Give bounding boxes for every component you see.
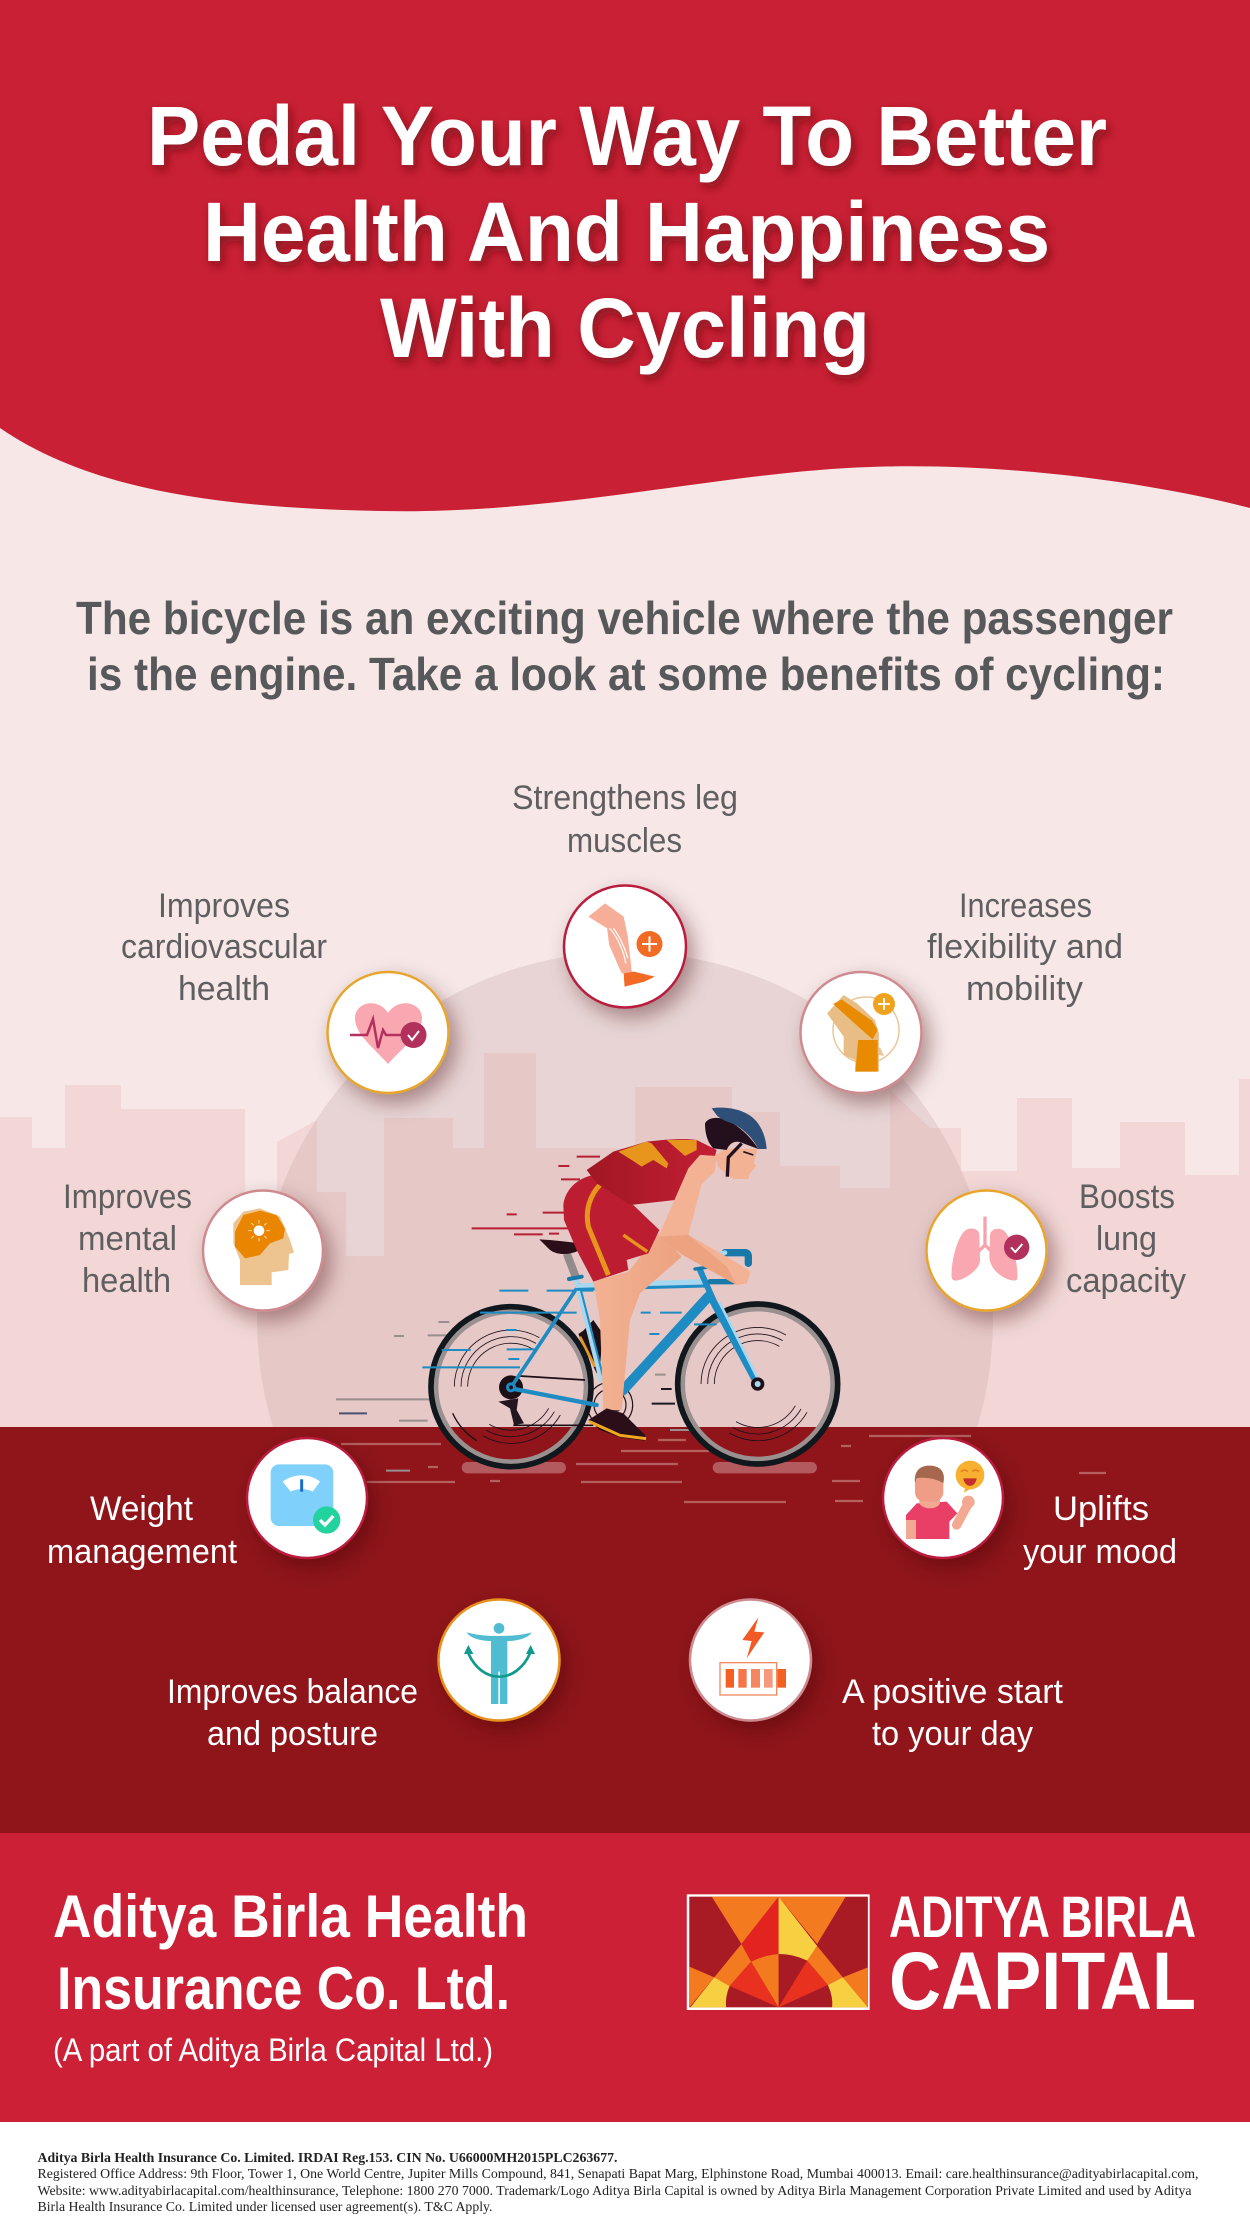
brain badge	[203, 1190, 323, 1310]
benefit: uplifts your mood	[883, 1438, 1177, 1571]
seat post and saddle	[567, 1253, 576, 1277]
label	[1066, 1178, 1186, 1300]
label: your mood	[1023, 1533, 1177, 1571]
intro text: is the engine. Take a look at some benefits of cycling:	[87, 648, 1165, 700]
title	[147, 89, 1107, 375]
label: A positive start	[842, 1673, 1064, 1711]
benefit: flexibility and mobility	[800, 887, 1123, 1093]
leg muscle badge	[564, 886, 686, 1008]
label: mental	[78, 1220, 177, 1258]
label: lung	[1096, 1220, 1157, 1258]
label: muscles	[567, 822, 682, 860]
rider arm and hand	[658, 1155, 751, 1285]
label	[842, 1673, 1064, 1753]
label: capacity	[1066, 1262, 1186, 1300]
label: Uplifts	[1053, 1490, 1149, 1528]
label: cardiovascular	[121, 928, 327, 966]
label: Improves balance	[167, 1673, 418, 1711]
rider leg and shoe	[593, 1233, 682, 1410]
weighing scale badge	[247, 1438, 367, 1558]
intro text: The bicycle is an exciting vehicle where the passenger	[76, 592, 1173, 644]
knee joint badge	[800, 972, 922, 1093]
label: Increases	[959, 887, 1092, 925]
jersey	[587, 1139, 717, 1205]
label: Improves	[63, 1178, 192, 1216]
legal footer: Birla Health Insurance Co. Limited under licensed user agreement(s). T&C Apply.	[38, 2199, 492, 2214]
wheel shadows	[462, 1462, 817, 1473]
label: flexibility and	[927, 928, 1123, 966]
balance figure badge	[438, 1600, 560, 1720]
label: Improves	[158, 887, 290, 925]
far leg and shoe	[578, 1320, 603, 1373]
company name: (A part of Aditya Birla Capital Ltd.)	[53, 2032, 493, 2068]
legal footer: Website: www.adityabirlacapital.com/healthinsurance, Telephone: 1800 270 7000. Trademark/Logo Aditya Birla Capital is owned by Aditya Birla Management Corporation Private Limited and used by Aditya	[38, 2183, 1192, 2198]
label	[512, 779, 738, 860]
ground speed streaks	[341, 1436, 1106, 1502]
label	[47, 1490, 238, 1571]
label: Boosts	[1079, 1178, 1175, 1216]
title: With Cycling	[380, 281, 870, 375]
drivetrain	[513, 1376, 633, 1428]
label	[121, 887, 327, 1008]
label: Strengthens leg	[512, 779, 738, 817]
intro text	[76, 592, 1173, 700]
title: Pedal Your Way To Better	[147, 89, 1107, 183]
label: mobility	[966, 970, 1083, 1008]
label: and posture	[207, 1715, 378, 1753]
benefit: mental health	[63, 1178, 323, 1310]
title: Health And Happiness	[203, 185, 1050, 279]
legal footer: Registered Office Address: 9th Floor, Tower 1, One World Centre, Jupiter Mills Compound, 841, Senapati Bapat Marg, Elphinstone Road, Mumbai 400013. Email: care.healthinsurance@adityabirlacapital.com,	[38, 2166, 1198, 2181]
logo wordmark	[889, 1885, 1196, 2027]
air speed lines	[336, 1157, 697, 1471]
page background	[0, 0, 1250, 1430]
heart badge	[328, 972, 448, 1093]
logo wordmark: CAPITAL	[889, 1936, 1196, 2027]
rear and front wheels	[431, 1304, 838, 1467]
label	[1023, 1490, 1177, 1571]
red header wave	[0, 0, 1250, 511]
battery energy badge	[690, 1600, 811, 1720]
legal footer	[38, 2150, 1198, 2214]
blue streaks behind frame	[422, 1291, 717, 1367]
benefit: positive start to your day	[690, 1600, 1064, 1753]
benefit: lung capacity	[926, 1178, 1186, 1310]
helmet and hair	[705, 1118, 758, 1150]
ground	[0, 1427, 1250, 1833]
bike frame	[511, 1253, 759, 1405]
label	[927, 887, 1123, 1008]
happy person badge	[883, 1438, 1003, 1558]
head and neck	[715, 1148, 757, 1179]
label: management	[47, 1533, 238, 1571]
legal footer: Aditya Birla Health Insurance Co. Limited. IRDAI Reg.153. CIN No. U66000MH2015PLC263677.	[38, 2150, 618, 2165]
company name	[53, 1883, 528, 2068]
label: Weight	[90, 1490, 194, 1528]
cyclist illustration	[336, 1108, 838, 1473]
company name: Insurance Co. Ltd.	[57, 1955, 510, 2022]
company name: Aditya Birla Health	[53, 1883, 528, 1950]
label: health	[82, 1262, 171, 1300]
lungs badge	[926, 1190, 1046, 1310]
benefit: cardiovascular health	[121, 887, 448, 1093]
label: health	[178, 970, 270, 1008]
benefit: balance and posture	[167, 1600, 560, 1753]
background city scene	[0, 957, 1250, 1427]
logo mark	[687, 1894, 870, 2010]
benefit: weight management	[47, 1438, 367, 1571]
shorts	[563, 1175, 659, 1282]
benefit: strengthens leg muscles	[512, 779, 738, 1008]
brand footer band	[0, 1833, 1250, 2122]
label	[167, 1673, 418, 1753]
label: to your day	[872, 1715, 1033, 1753]
label	[63, 1178, 192, 1300]
